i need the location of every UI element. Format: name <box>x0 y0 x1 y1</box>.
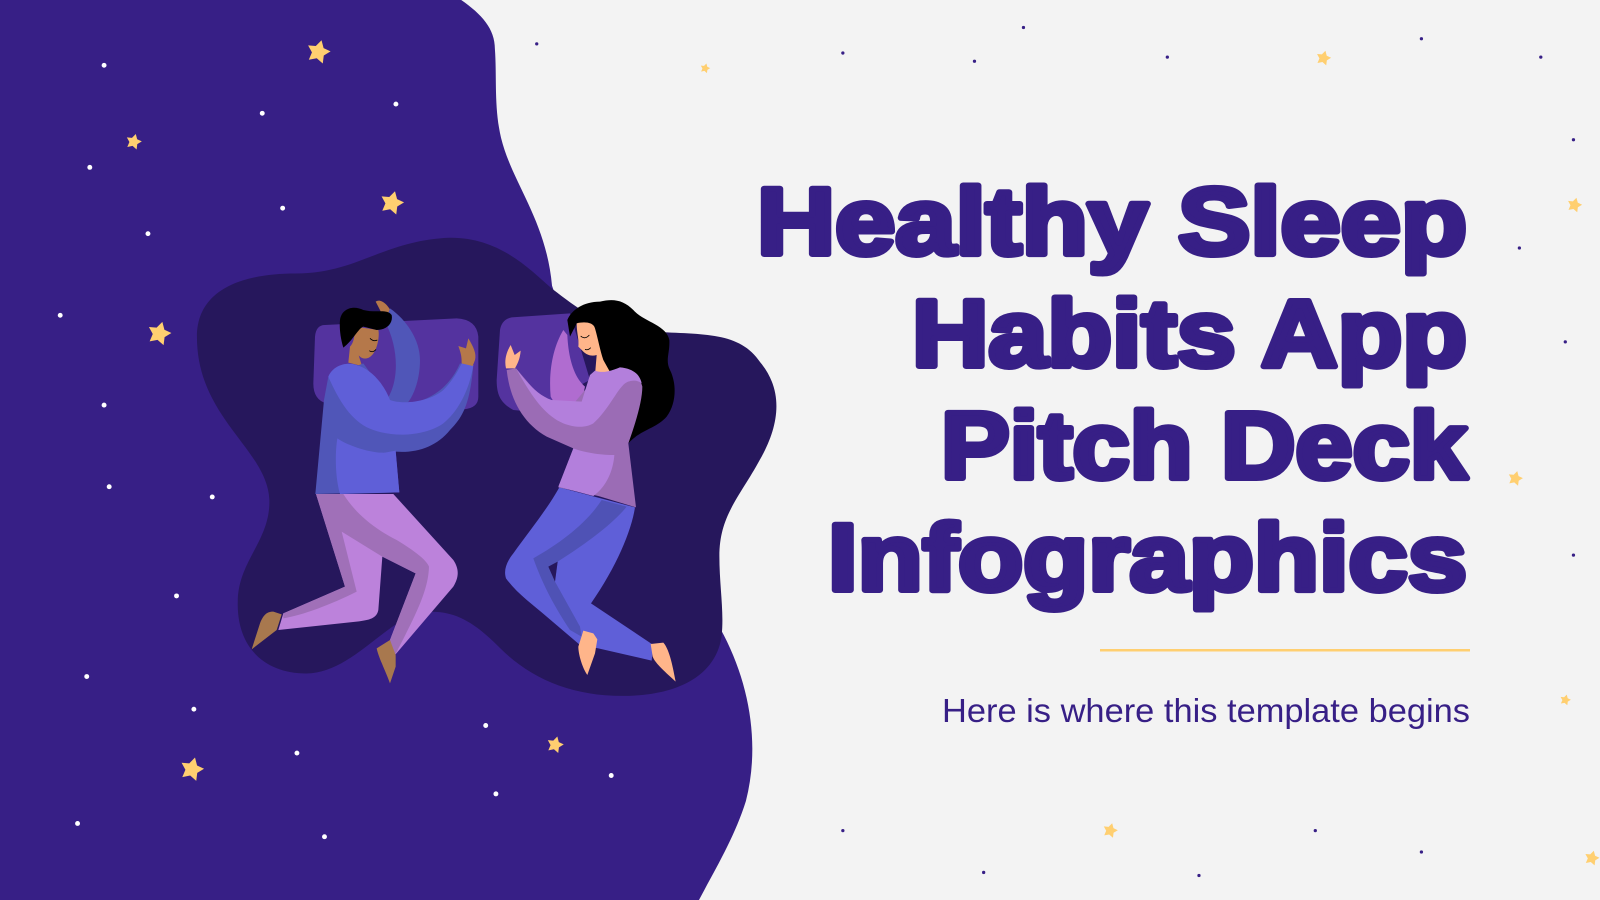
woman's sweater shade <box>507 367 642 507</box>
illustration: sleeping woman <box>497 300 676 682</box>
man's sleeve <box>328 363 473 435</box>
gap between woman's legs <box>548 562 558 582</box>
title line 4: Infographics <box>828 505 1467 611</box>
woman's sleeve <box>516 367 642 427</box>
man's lower torso <box>336 438 399 494</box>
man's pants <box>278 494 458 655</box>
woman's eye and mouth <box>581 335 591 350</box>
navy dots on light background <box>535 26 1575 877</box>
title line 2: Habits App <box>912 281 1467 387</box>
woman's lower torso <box>558 448 614 496</box>
man's hair <box>340 308 392 348</box>
title line 3: Pitch Deck <box>941 393 1467 499</box>
woman's pants shade <box>533 500 627 637</box>
purple night background shape <box>0 0 752 900</box>
woman's face and neck <box>577 322 612 375</box>
man's raised hand <box>376 301 391 323</box>
white dots on night sky <box>58 63 614 839</box>
dark blob behind sleepers <box>197 238 776 696</box>
man's eye and mouth <box>369 338 377 352</box>
title line 1: Healthy Sleep <box>757 169 1467 275</box>
woman's front hand <box>505 345 521 368</box>
subtitle: Here is where this template begins <box>942 692 1470 729</box>
title <box>757 169 1467 611</box>
gold divider line <box>1100 649 1470 652</box>
man's face and neck <box>348 327 379 366</box>
illustration: sleeping man <box>252 301 478 683</box>
woman's pillow <box>497 313 590 412</box>
man's front hand <box>458 338 475 366</box>
man's feet <box>252 612 396 683</box>
woman's pants <box>505 487 653 661</box>
man's pillow <box>313 318 478 409</box>
woman's back arm <box>550 330 585 402</box>
man's back arm <box>385 308 420 404</box>
man's sweater shade <box>315 363 473 494</box>
man's pants shade <box>283 494 429 655</box>
woman's feet <box>578 631 676 682</box>
woman's hair <box>567 300 675 443</box>
